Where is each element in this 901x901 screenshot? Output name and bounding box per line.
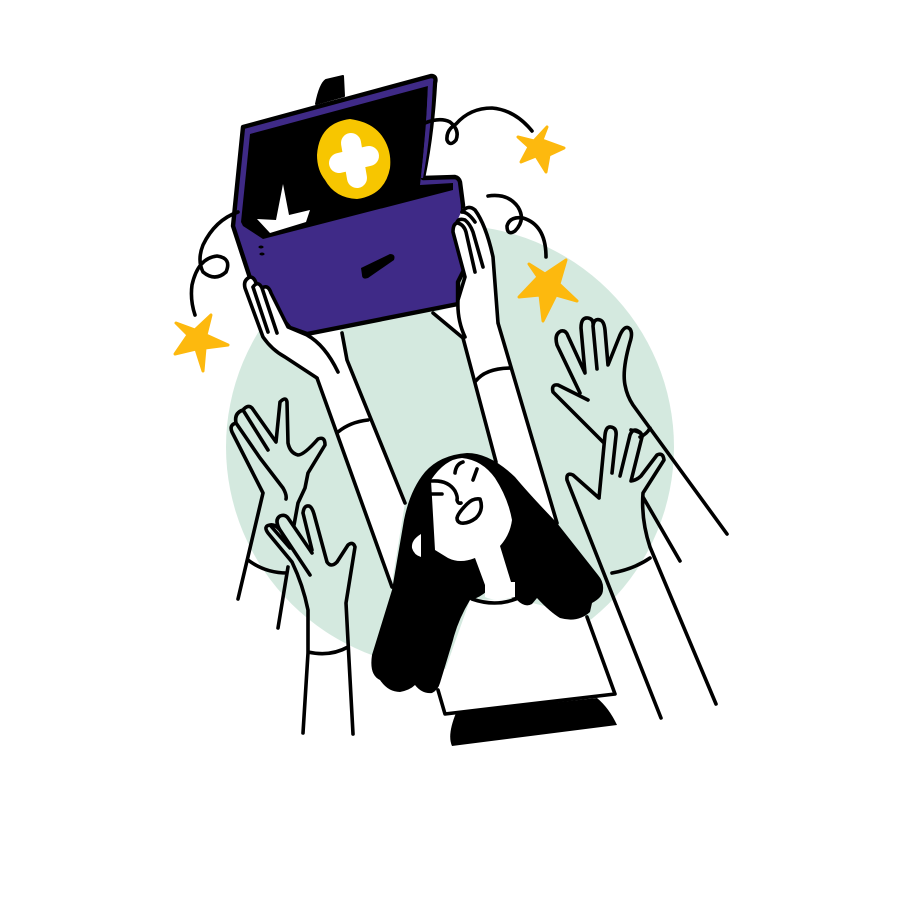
- left hand holding kit: [245, 277, 340, 378]
- kit black interior: [241, 86, 453, 239]
- star upper right: [518, 127, 564, 172]
- swirl left: [191, 212, 238, 315]
- eyebrows: [455, 462, 477, 480]
- star right: [519, 260, 577, 321]
- kit clasp: [361, 254, 394, 279]
- mouth: [457, 499, 481, 523]
- cross badge: [317, 119, 390, 199]
- collar: [472, 599, 516, 603]
- closed eye and nose: [431, 481, 461, 503]
- left arm: [263, 330, 405, 587]
- skirt: [450, 698, 617, 746]
- star left: [175, 315, 228, 371]
- face and neck: [412, 458, 516, 603]
- background circle: [226, 225, 674, 669]
- kit handle tab: [316, 76, 344, 104]
- lower left back hand: [231, 399, 325, 628]
- right hand holding kit: [453, 207, 498, 337]
- shirt: [438, 599, 615, 714]
- first aid kit: [233, 76, 464, 334]
- lower left front hand: [266, 506, 355, 734]
- kit purple body: [233, 76, 464, 334]
- swirl right: [488, 195, 546, 257]
- white star in kit: [257, 184, 310, 233]
- right arm: [433, 300, 557, 523]
- kit dots: [258, 246, 265, 256]
- swirl upper right: [425, 108, 532, 144]
- upper right hand: [553, 318, 727, 561]
- hair: [371, 453, 603, 693]
- lower right hand: [567, 427, 716, 718]
- ear: [412, 534, 421, 557]
